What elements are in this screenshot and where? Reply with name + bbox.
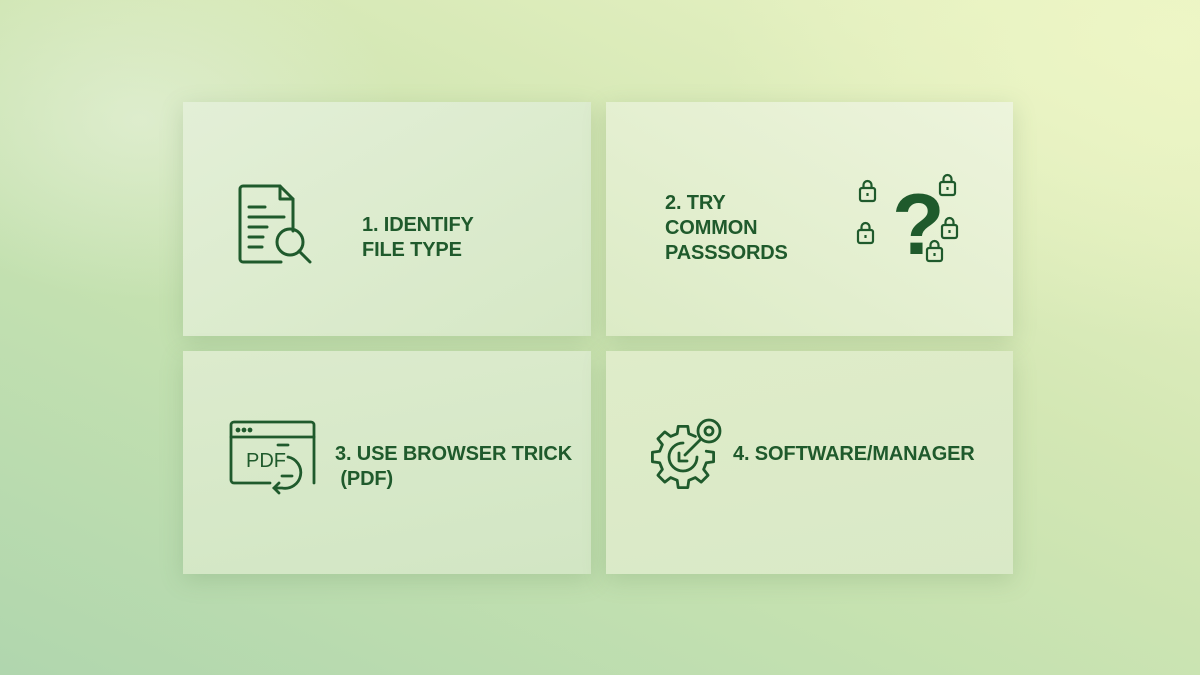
text: step 2: 2. TRY	[665, 192, 726, 214]
icon: document with magnifier	[238, 184, 312, 264]
text: step 2: COMMON	[665, 217, 757, 239]
text: step 1	[362, 214, 474, 261]
text: step 2	[665, 192, 788, 264]
text: step 3: 3. USE BROWSER TRICK	[335, 443, 572, 465]
icon: browser window with PDF	[230, 420, 316, 494]
icon: question mark with locks: ?	[892, 177, 945, 273]
icon: browser window with PDF: PDF	[246, 450, 286, 472]
text: step 4: 4. SOFTWARE/MANAGER	[733, 443, 975, 465]
text: step 1: 1. IDENTIFY	[362, 214, 474, 236]
icon: gear with key	[651, 418, 722, 489]
panel: browser trick	[183, 351, 591, 574]
text: step 3	[335, 443, 572, 490]
panel: software manager	[606, 351, 1013, 574]
panel: identify file type	[183, 102, 591, 336]
panel: try common passwords	[606, 102, 1013, 336]
text: step 3: (PDF)	[340, 468, 393, 490]
text: step 2: PASSSORDS	[665, 242, 788, 264]
icon: question mark with locks	[856, 174, 958, 273]
text: step 1: FILE TYPE	[362, 239, 462, 261]
